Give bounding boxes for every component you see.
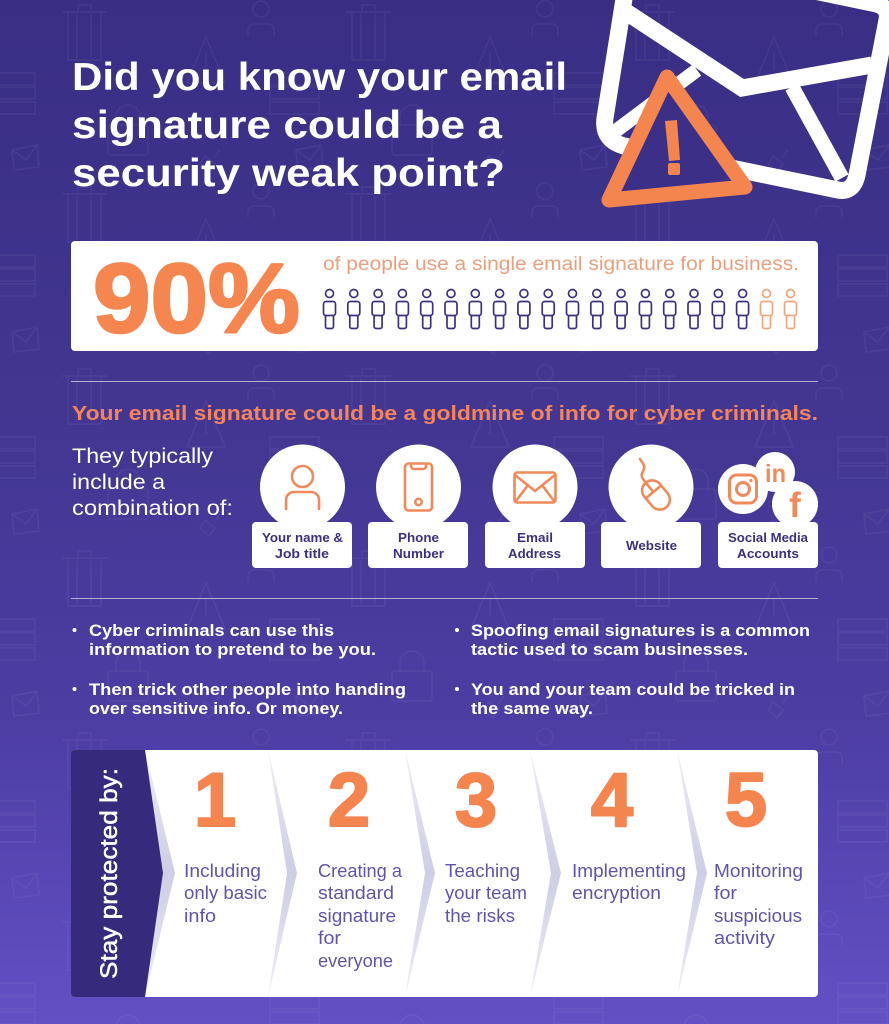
text: they typically include: They typically xyxy=(72,445,214,468)
item: website xyxy=(601,444,701,568)
bullets: right column xyxy=(455,621,810,718)
title: signature could be a xyxy=(72,104,502,147)
dark side label xyxy=(71,750,163,997)
icon: person xyxy=(286,466,319,509)
step 1: only basic xyxy=(184,883,267,903)
step 2: 2 xyxy=(328,758,370,843)
icon: envelope xyxy=(605,0,887,190)
bullets: right column: tactic used to scam businesses. xyxy=(471,640,748,659)
label card xyxy=(485,522,585,568)
panel: stay protected xyxy=(71,750,818,997)
step 5: 5 xyxy=(725,758,767,843)
label card: Your name & xyxy=(262,530,343,545)
text: they typically include xyxy=(72,445,233,520)
step 2: for xyxy=(318,928,341,948)
label card xyxy=(252,522,352,568)
step 2: standard xyxy=(318,883,394,903)
step 5: for xyxy=(714,883,737,903)
text: they typically include: include a xyxy=(72,471,165,494)
statistic caption: of people use a single email signature for business. xyxy=(323,254,799,275)
step 5 xyxy=(714,758,803,948)
step 2: Creating a xyxy=(318,861,403,881)
step 2: signature xyxy=(318,906,396,926)
step 3: Teaching xyxy=(445,861,520,881)
step 4: Implementing xyxy=(572,861,686,881)
step 1: Including xyxy=(184,861,261,881)
step 5: suspicious xyxy=(714,906,802,926)
bullets: left column: Cyber criminals can use this xyxy=(89,621,334,640)
bullets: left column xyxy=(72,621,406,718)
item: email address xyxy=(485,444,585,568)
label card: Social Media xyxy=(728,530,809,545)
label card: Job title xyxy=(275,546,329,561)
label card: Number xyxy=(393,546,444,561)
icon: linkedin: in xyxy=(765,460,786,488)
bullets: right column: Spoofing email signatures is a common xyxy=(471,621,810,640)
bullets: right column: You and your team could be tricked in xyxy=(471,680,795,699)
item: phone number xyxy=(368,444,468,568)
title: security weak point? xyxy=(72,152,505,195)
step 3: 3 xyxy=(455,758,497,843)
bullets: left column: Then trick other people into handing xyxy=(89,680,406,699)
step 4: 4 xyxy=(591,758,633,843)
icon: warning triangle xyxy=(609,77,745,200)
big number: 90% xyxy=(93,243,300,353)
step 1: info xyxy=(184,906,216,926)
bullets: right column: the same way. xyxy=(471,699,593,718)
heading: goldmine: Your email signature could be a goldmine of info for cyber criminals. xyxy=(72,403,818,425)
step 3: the risks xyxy=(445,906,515,926)
text: they typically include: combination of: xyxy=(72,497,233,520)
icon: exclamation mark xyxy=(665,120,680,175)
step 4 xyxy=(572,758,686,903)
icon: envelope with warning triangle xyxy=(605,0,887,200)
step 4: encryption xyxy=(572,883,661,903)
icon: instagram xyxy=(718,464,768,514)
step 2 xyxy=(318,758,403,971)
step 2: everyone xyxy=(318,951,393,971)
label card: Phone xyxy=(398,530,439,545)
title xyxy=(72,56,567,195)
label card: Email xyxy=(517,530,553,545)
label card: Website xyxy=(626,538,677,553)
chevron dividers xyxy=(145,750,707,997)
bullets: left column: information to pretend to be you. xyxy=(89,640,376,659)
pictogram: 20 people xyxy=(324,290,796,328)
title: Did you know your email xyxy=(72,56,567,99)
item: social media accounts xyxy=(718,452,818,568)
step 5: activity xyxy=(714,928,775,948)
icon: computer mouse xyxy=(638,459,674,514)
label card xyxy=(718,522,818,568)
item: name and job title xyxy=(252,444,352,568)
dark side label: Stay protected by: xyxy=(96,768,123,979)
label card: Address xyxy=(508,546,561,561)
icon: envelope small xyxy=(514,472,556,502)
label card: Accounts xyxy=(737,546,799,561)
step 1: 1 xyxy=(194,758,236,843)
step 3: your team xyxy=(445,883,527,903)
step 1 xyxy=(184,758,267,926)
icon: phone xyxy=(405,464,432,510)
step 3 xyxy=(445,758,527,926)
panel: 90 percent statistic xyxy=(71,241,818,353)
icon: facebook: f xyxy=(789,486,801,525)
label card xyxy=(368,522,468,568)
step 5: Monitoring xyxy=(714,861,803,881)
bullets: left column: over sensitive info. Or money. xyxy=(89,699,343,718)
